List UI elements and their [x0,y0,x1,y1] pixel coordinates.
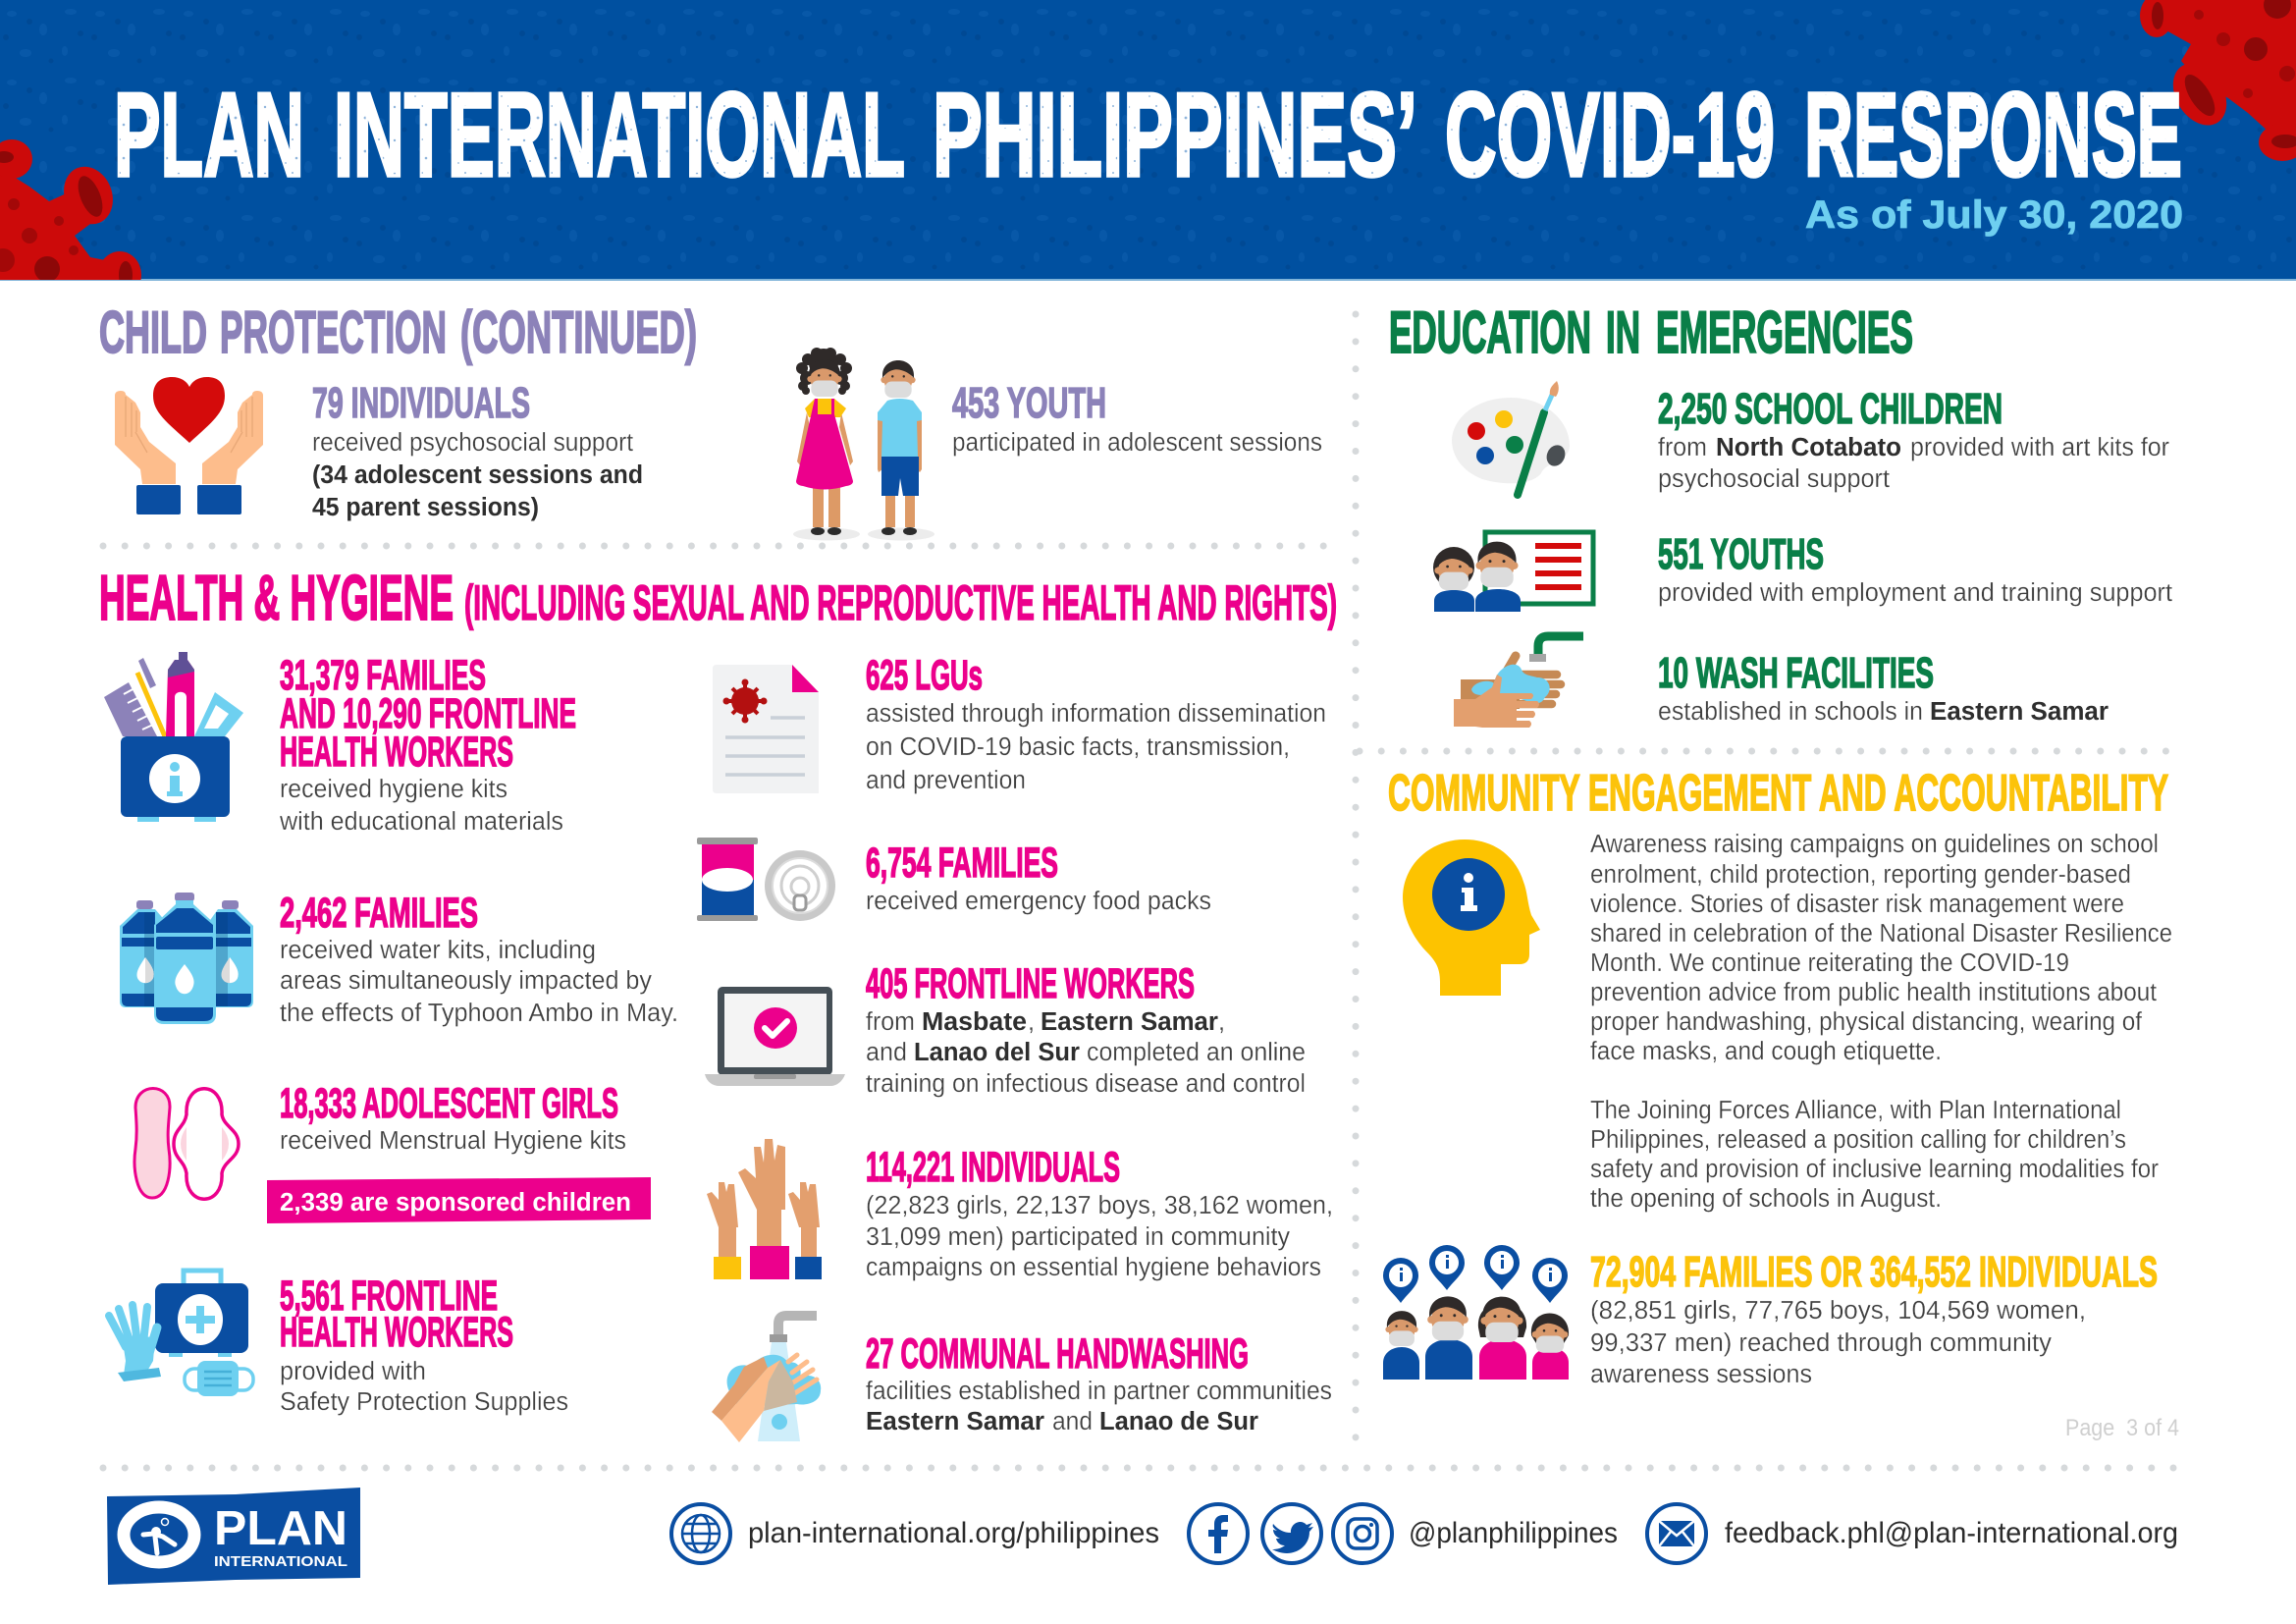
text block: awareness raising campaigns [1590,831,2172,1065]
text block: joining forces alliance: safety and provision of inclusive learning modalities for [1590,1156,2159,1183]
stat: 79 individuals: (34 adolescent sessions and [312,461,643,489]
stat: water kits [280,890,678,1027]
contact: website [671,1504,1159,1563]
stat: safety protection supplies: 5,561 FRONTLINE [280,1272,498,1320]
panel: child protection [99,299,1322,540]
stat: hygiene kits: AND 10,290 FRONTLINE [280,690,576,737]
icon: heart in hands [115,377,263,514]
stat: families reached: 99,337 men) reached through community [1590,1329,2052,1357]
stat: hygiene campaigns: 31,099 men) participated in community [866,1223,1290,1251]
text block: joining forces alliance: The Joining Forces Alliance, with Plan International [1590,1097,2121,1124]
stat: safety protection supplies: HEALTH WORKERS [280,1309,513,1356]
stat: frontline workers: from [866,1008,915,1036]
heading: health and hygiene: (INCLUDING SEXUAL AND REPRODUCTIVE HEALTH AND RIGHTS) [464,575,1337,630]
stat: hygiene campaigns [866,1144,1333,1281]
page number: Page 3 of 4 [2065,1415,2179,1441]
stat: communal handwashing: Eastern Samar [866,1408,1044,1435]
title [114,68,2182,201]
stat: youths: 551 YOUTHS [1658,530,1824,578]
stat: 453 youth: 453 YOUTH [952,379,1106,427]
stat: frontline workers: Masbate [922,1008,1027,1036]
text block: awareness raising campaigns: Awareness raising campaigns on guidelines on school [1590,831,2159,858]
stat: water kits: received water kits, including [280,937,596,964]
contact: website: plan-international.org/philippines [748,1517,1159,1549]
text block: awareness raising campaigns: Month. We continue reiterating the COVID-19 [1590,949,2069,977]
heading: education in emergencies: EDUCATION [1389,299,1591,365]
footer [107,1488,2178,1585]
contact: email [1647,1504,2178,1563]
callout: sponsored children [267,1177,651,1223]
stat: wash facilities: 10 WASH FACILITIES [1658,649,1934,697]
stat: frontline workers: completed an online [1087,1039,1306,1066]
icon: safety protection supplies [109,1271,253,1396]
stat: hygiene kits [279,652,576,836]
contact: social media: @planphilippines [1409,1517,1618,1549]
stat: youths [1658,530,2172,607]
stat: 453 youth: participated in adolescent sessions [952,429,1322,457]
icon: laptop with check [705,987,845,1086]
stat: hygiene campaigns: 114,221 INDIVIDUALS [866,1144,1120,1191]
stat: menstrual hygiene kits: 18,333 ADOLESCENT GIRLS [280,1080,618,1127]
stat: wash facilities: established in schools in [1658,698,1923,726]
stat: water kits: the effects of Typhoon Ambo in May. [280,1000,678,1027]
stat: hygiene kits: 31,379 FAMILIES [280,652,486,699]
stat: school children: psychosocial support [1658,465,1890,493]
icon: COVID document [713,665,819,793]
text block: awareness raising campaigns: shared in celebration of the National Disaster Resilience [1590,920,2172,947]
stat: water kits: 2,462 FAMILIES [280,890,478,937]
icon: water bottles [120,893,253,1024]
stat: frontline workers: and [866,1039,907,1066]
boy [878,360,922,535]
stat: 453 youth [952,379,1322,457]
stat: safety protection supplies: Safety Protection Supplies [280,1388,568,1416]
icon: raised hands [707,1139,822,1279]
title: INTERNATIONAL [334,68,905,201]
stat: menstrual hygiene kits [280,1080,626,1155]
heading: education in emergencies: EMERGENCIES [1656,299,1913,365]
stat: communal handwashing: facilities established in partner communities [866,1378,1332,1405]
stat: families reached: awareness sessions [1590,1361,1812,1388]
stat: hygiene kits: HEALTH WORKERS [280,729,513,776]
contact: email: feedback.phl@plan-international.org [1725,1517,2178,1549]
icon: WASH facility [1454,636,1583,728]
logo: Plan International: PLAN [214,1502,347,1555]
text block: joining forces alliance: the opening of schools in August. [1590,1185,1942,1213]
stat: 625 LGUs [866,652,1326,794]
text block: awareness raising campaigns: violence. Stories of disaster risk management were [1590,891,2124,918]
stat: 625 LGUs: and prevention [866,767,1026,794]
stat: frontline workers: Eastern Samar [1041,1008,1218,1036]
heading: child protection: PROTECTION [220,299,447,365]
panel: community engagement and accountability [1383,765,2179,1441]
stat: hygiene campaigns: campaigns on essential hygiene behaviors [866,1254,1321,1281]
stat: school children [1658,385,2169,493]
stat: frontline workers: Lanao del Sur [914,1039,1080,1066]
icon: canned food [697,838,835,921]
logo: Plan International [107,1488,360,1585]
icon: sanitary pads [134,1088,239,1199]
stat: 625 LGUs: assisted through information dissemination [866,700,1326,728]
stat: 79 individuals: 45 parent sessions) [312,494,539,521]
stat: frontline workers: training on infectious disease and control [866,1070,1306,1098]
stat: hygiene kits: with educational materials [279,808,563,836]
stat: food packs: received emergency food packs [866,888,1211,915]
icon: community with information pins [1383,1245,1569,1380]
icon: head with information [1403,839,1540,996]
panel: education in emergencies [1389,299,2172,728]
stat: school children: 2,250 SCHOOL CHILDREN [1658,385,2002,433]
virus illustration: left [0,139,141,280]
logo: Plan International: INTERNATIONAL [214,1554,347,1570]
heading: education in emergencies: IN [1606,299,1640,365]
stat: hygiene kits: received hygiene kits [280,776,507,803]
title: PHILIPPINES’ [933,68,1417,201]
stat: menstrual hygiene kits: received Menstrual Hygiene kits [280,1127,626,1155]
stat: communal handwashing [866,1330,1332,1435]
virus illustration: right [2140,0,2296,161]
stat: school children: from [1658,434,1707,461]
callout: sponsored children: 2,339 are sponsored children [280,1189,631,1217]
stat: food packs: 6,754 FAMILIES [866,839,1058,887]
stat: youths: provided with employment and training support [1658,579,2172,607]
icon: youth training [1433,532,1593,612]
icon: art palette [1452,381,1570,495]
panel: health and hygiene [99,562,1337,1442]
stat: frontline workers [866,960,1306,1098]
stat: wash facilities: Eastern Samar [1930,698,2109,726]
stat: school children: North Cotabato [1716,434,1901,461]
heading: child protection: (CONTINUED) [460,299,697,365]
stat: families reached [1590,1248,2158,1388]
stat: food packs [866,839,1211,915]
stat: hygiene campaigns: (22,823 girls, 22,137 boys, 38,162 women, [866,1192,1333,1219]
stat: frontline workers: 405 FRONTLINE WORKERS [866,960,1195,1007]
stat: water kits: areas simultaneously impacted by [280,967,652,995]
stat: 79 individuals [312,379,643,521]
stat: 625 LGUs: 625 LGUs [866,652,983,699]
contact: social media [1189,1504,1618,1563]
heading: education in emergencies [1389,299,1913,365]
icon: handwashing station [712,1316,821,1442]
text block: awareness raising campaigns: enrolment, child protection, reporting gender-based [1590,861,2131,889]
stat: safety protection supplies [280,1272,568,1416]
stat: school children: provided with art kits for [1910,434,2169,461]
heading: child protection [99,299,697,365]
stat: families reached: (82,851 girls, 77,765 boys, 104,569 women, [1590,1297,2086,1325]
text block: awareness raising campaigns: proper handwashing, physical distancing, wearing of [1590,1008,2143,1036]
header banner [0,0,2296,298]
title: COVID-19 [1445,68,1775,201]
title: PLAN [114,68,304,201]
icon: hygiene kit [104,652,243,822]
stat: frontline workers: , [1218,1008,1225,1036]
stat: 625 LGUs: on COVID-19 basic facts, transmission, [866,733,1290,761]
girl [796,348,853,535]
stat: wash facilities [1658,649,2109,726]
text block: joining forces alliance: Philippines, released a position calling for children’s [1590,1126,2126,1154]
stat: safety protection supplies: provided with [280,1358,426,1385]
stat: frontline workers: , [1028,1008,1035,1036]
icon: girl and boy with masks [793,348,934,540]
text block: awareness raising campaigns: prevention advice from public health institutions about [1590,979,2157,1006]
stat: 79 individuals: received psychosocial support [312,429,633,457]
stat: 79 individuals: 79 INDIVIDUALS [312,379,530,427]
text block: awareness raising campaigns: face masks, and cough etiquette. [1590,1038,1942,1065]
heading: health and hygiene [99,562,1337,633]
stat: communal handwashing: Lanao de Sur [1099,1408,1258,1435]
text block: joining forces alliance [1590,1097,2159,1213]
date subtitle: As of July 30, 2020 [1805,193,2183,237]
stat: communal handwashing: and [1052,1408,1093,1435]
heading: health and hygiene: HEALTH & HYGIENE [99,562,454,633]
stat: communal handwashing: 27 COMMUNAL HANDWASHING [866,1330,1249,1378]
heading: child protection: CHILD [99,299,207,365]
